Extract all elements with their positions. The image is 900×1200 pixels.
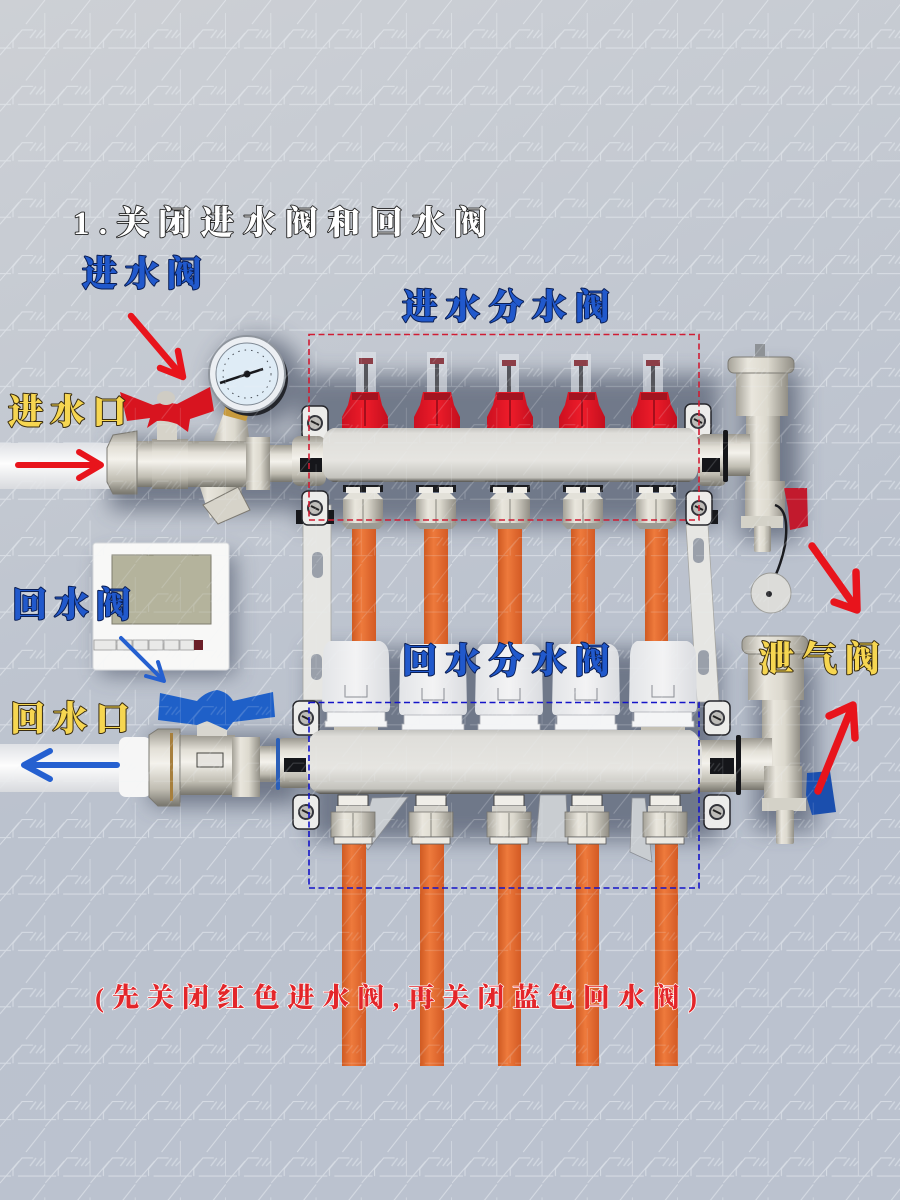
arrow: upper vent — [812, 546, 857, 610]
flow gauges on supply manifold — [356, 352, 663, 394]
top pipes: orange — [352, 522, 668, 647]
arrow: lower vent — [818, 705, 855, 791]
blue vent handle — [806, 771, 836, 815]
pressure gauge — [209, 336, 288, 445]
arrow: to inlet valve — [131, 316, 183, 377]
return ball valve — [149, 722, 310, 806]
red inlet valve handle — [120, 387, 214, 432]
red flow knobs — [342, 392, 677, 429]
white inlet pipe — [0, 443, 112, 489]
label: air vent valve: 泄气阀 — [759, 640, 880, 679]
upper air vent valve — [720, 344, 794, 552]
arrow: to return valve — [121, 638, 164, 681]
arrow: return flow — [24, 751, 117, 779]
title: 1.关闭进水阀和回水阀 — [73, 205, 487, 242]
red vent handle — [784, 488, 808, 530]
blue dashed box: return manifold — [309, 702, 699, 888]
label: inlet port: 进水口 — [8, 393, 127, 432]
label: supply manifold: 进水分水阀 — [402, 288, 610, 327]
return outlet nuts — [331, 795, 687, 844]
supply outlet nuts — [341, 485, 678, 529]
thermal actuators — [322, 641, 697, 734]
inlet ball valve with strainer — [107, 420, 292, 524]
thermostat panel — [93, 543, 229, 670]
drop shadows — [100, 336, 815, 840]
blue return valve handle — [158, 690, 275, 730]
label: return valve: 回水阀 — [12, 586, 131, 625]
label: return manifold: 回水分水阀 — [402, 642, 610, 681]
label: return port: 回水口 — [10, 700, 130, 739]
label: inlet valve: 进水阀 — [82, 255, 202, 294]
red dashed box: supply manifold — [309, 334, 699, 520]
arrow: inlet flow — [18, 452, 101, 478]
note: closing order: (先关闭红色进水阀,再关闭蓝色回水阀) — [95, 982, 697, 1013]
lower manifold outlet wires — [360, 795, 652, 862]
white return pipe — [0, 737, 151, 797]
supply manifold — [292, 404, 726, 525]
mounting brackets — [296, 505, 719, 702]
return manifold — [293, 701, 740, 829]
lower air vent valve — [736, 636, 808, 844]
lower pipes: orange — [342, 840, 678, 1066]
vent cap with black wire — [751, 505, 791, 613]
